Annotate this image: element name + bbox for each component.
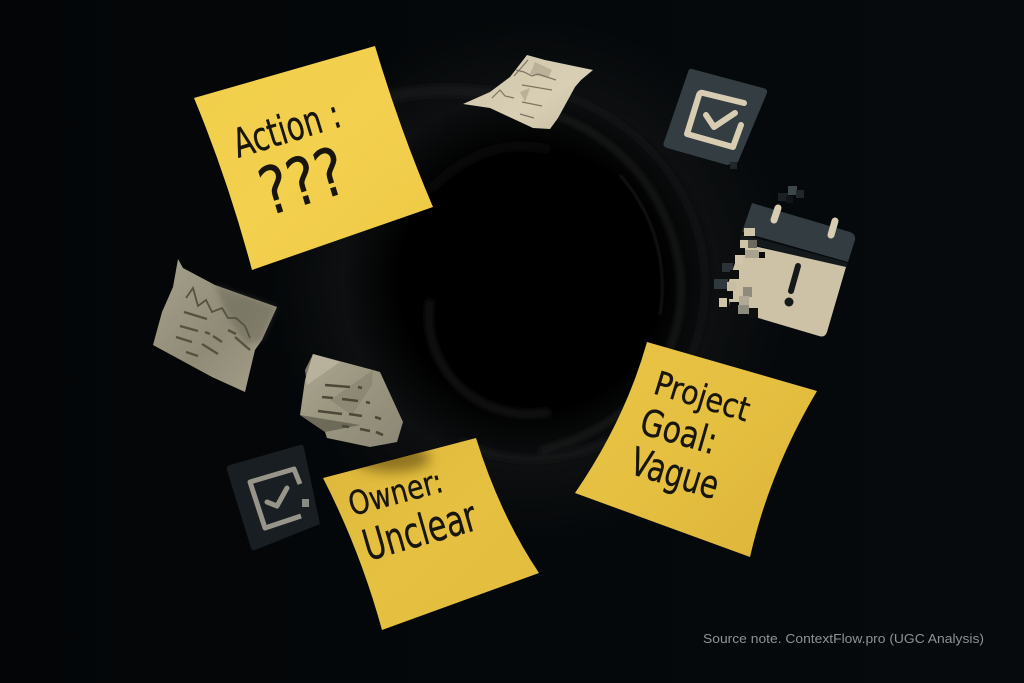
crumpled paper: left bbox=[153, 259, 277, 392]
icon: check card bottom left bbox=[227, 445, 320, 550]
crumpled paper: top bbox=[463, 55, 593, 129]
crumpled paper: center bbox=[300, 354, 403, 447]
handwritten label: action: Action : bbox=[227, 91, 346, 168]
sticky note: action bbox=[194, 46, 433, 270]
handwritten label: vague: Vague bbox=[625, 440, 724, 509]
check box outline bbox=[250, 469, 301, 528]
handwritten label: unclear: Unclear bbox=[357, 491, 483, 572]
sticky note: project goal vague bbox=[575, 342, 817, 557]
check mark bbox=[706, 113, 735, 127]
handwritten question marks: ??? bbox=[250, 133, 355, 231]
icon: pixelating calendar bbox=[714, 186, 855, 336]
check mark bbox=[267, 488, 287, 506]
calendar body bbox=[727, 244, 846, 336]
handwritten label: goal: Goal: bbox=[636, 400, 722, 463]
check box outline bbox=[687, 93, 744, 147]
exclamation mark bbox=[791, 266, 798, 291]
handwritten label: project: Project bbox=[650, 363, 755, 429]
source note: Source note. ContextFlow.pro (UGC Analysis) bbox=[703, 632, 984, 646]
dissolving pixels bbox=[714, 186, 804, 318]
sticky note: owner unclear bbox=[323, 438, 539, 630]
pixel bbox=[302, 499, 309, 507]
black hole swirl bbox=[270, 20, 790, 540]
icon: check card top right bbox=[663, 69, 767, 169]
calendar header bbox=[742, 203, 855, 262]
infographic canvas bbox=[153, 46, 984, 646]
calendar rings bbox=[774, 208, 778, 220]
handwritten label: owner: Owner: bbox=[344, 461, 447, 524]
